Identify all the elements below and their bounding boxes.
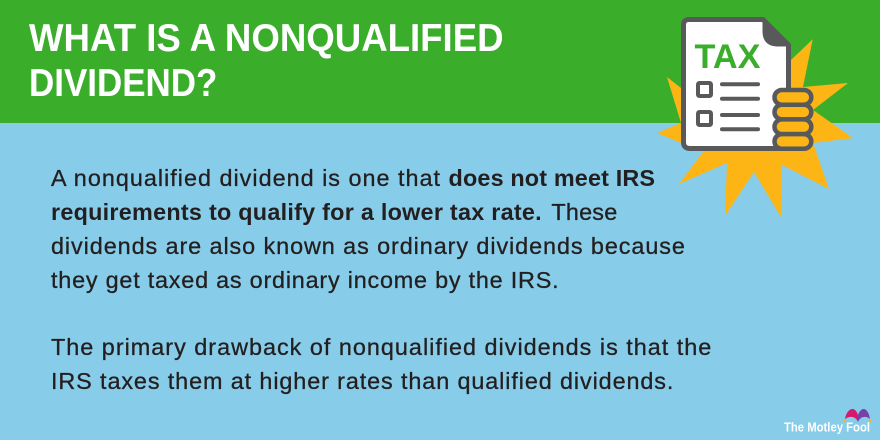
body text: first paragraph: dividends are also known as ordinary dividends because [51, 233, 686, 259]
title: WHAT IS A NONQUALIFIED [28, 17, 503, 60]
logo: jester hat [844, 409, 871, 422]
body text: first paragraph: A nonqualified dividend is one that does not meet IRS [51, 165, 655, 191]
icon text: TAX: TAX [694, 38, 760, 76]
icon: hand fingers [774, 90, 811, 149]
icon: document [684, 18, 790, 148]
icon: starburst [657, 39, 853, 217]
body text: first paragraph: they get taxed as ordinary income by the IRS. [51, 267, 559, 293]
body text: second paragraph: IRS taxes them at higher rates than qualified dividends. [51, 368, 674, 394]
title [28, 17, 503, 105]
body text: second paragraph: The primary drawback of nonqualified dividends is that the [51, 334, 712, 360]
logo text: The Motley Fool [784, 420, 870, 434]
logo: The Motley Fool [784, 409, 872, 434]
icon: tax form with starburst and hand [657, 17, 853, 217]
body text: first paragraph: requirements to qualify for a lower tax rate. These [51, 199, 617, 225]
title: DIVIDEND? [28, 62, 217, 105]
body text: second paragraph [51, 334, 712, 394]
header band [0, 0, 880, 123]
body text: first paragraph [50, 165, 686, 294]
